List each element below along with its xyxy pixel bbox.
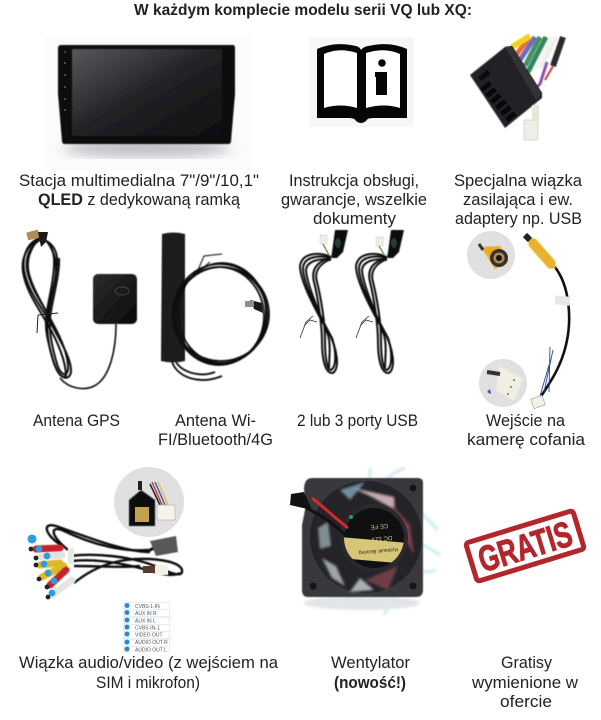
photo: cooling fan xyxy=(290,468,440,615)
caption: freebies xyxy=(471,654,578,711)
caption: fan: (nowość!) xyxy=(334,674,406,692)
photo: USB cable 2 xyxy=(356,230,404,373)
legend: connector table: AUX IN L xyxy=(135,618,156,624)
legend: connector table: CVBS-1-IN xyxy=(135,604,160,610)
caption: power harness: adaptery np. USB xyxy=(455,210,582,228)
panel: rear camera input xyxy=(467,231,586,449)
caption: WiFi antenna xyxy=(158,412,273,449)
panel: GPS antenna xyxy=(23,230,137,430)
caption: rear camera input: Wejście na xyxy=(486,412,566,430)
photo: GPS antenna xyxy=(23,230,137,389)
panel: manual xyxy=(281,37,427,228)
caption: power harness: Specjalna wiązka xyxy=(454,172,583,190)
photo: cooling fan: DC 12V xyxy=(371,534,392,542)
caption: WiFi antenna: Antena Wi- xyxy=(175,412,256,430)
panel: WiFi antenna xyxy=(158,232,273,449)
caption: audio video harness xyxy=(19,654,279,692)
title: W każdym komplecie modelu serii VQ lub XQ: xyxy=(134,2,472,19)
caption: manual: Instrukcja obsługi, xyxy=(289,172,419,190)
panel: head unit xyxy=(19,37,259,209)
photo: cooling fan: CE FE xyxy=(370,522,388,530)
caption: power harness: zasilająca i ew. xyxy=(463,191,573,209)
photo: USB cable 1 xyxy=(300,230,348,373)
caption: station xyxy=(19,172,259,209)
photo: ISO connector with wires xyxy=(470,36,563,140)
photo: cooling fan: Hydraulic Bearing xyxy=(358,546,398,555)
legend: connector table: CVBS-IN-1 xyxy=(135,626,160,632)
photo: RCA harness xyxy=(28,525,182,599)
panel: fan xyxy=(290,468,440,692)
legend: connector table: AUX IN R xyxy=(135,611,157,617)
panel: power harness xyxy=(454,36,583,228)
caption: audio video harness: SIM i mikrofon) xyxy=(96,674,200,692)
caption: WiFi antenna: FI/Bluetooth/4G xyxy=(158,431,273,449)
caption: fan: Wentylator xyxy=(331,654,411,672)
legend: connector table: AUDIO OUT R xyxy=(135,640,168,646)
caption: freebies: wymienione w xyxy=(471,674,578,692)
caption: station: QLED z dedykowaną ramką xyxy=(38,191,241,209)
caption: power harness xyxy=(454,172,583,228)
caption: manual xyxy=(281,172,427,228)
icon: book with info sign xyxy=(310,37,414,127)
caption: rear camera input xyxy=(467,412,586,449)
inset: RCA plug xyxy=(467,231,515,279)
panel: audio video harness xyxy=(19,467,279,692)
caption: fan xyxy=(331,654,411,692)
caption: USB ports: 2 lub 3 porty USB xyxy=(297,412,418,430)
caption: manual: dokumenty xyxy=(313,210,397,228)
photo: multimedia station xyxy=(45,37,252,170)
caption: freebies: Gratisy xyxy=(501,654,553,672)
photo: camera cable xyxy=(525,235,570,409)
caption: station: Stacja multimedialna 7"/9"/10,1" xyxy=(19,172,259,190)
legend: connector table: VIDEO OUT xyxy=(135,632,163,638)
caption: manual: gwarancje, wszelkie xyxy=(281,191,427,209)
legend: connector table: AUDIO OUT L xyxy=(135,648,167,654)
inset: SIM connector xyxy=(114,467,184,537)
caption: freebies: ofercie xyxy=(500,693,552,711)
photo: WiFi/Bluetooth/4G antenna xyxy=(161,232,269,380)
caption: rear camera input: kamerę cofania xyxy=(467,431,586,449)
panel: USB ports xyxy=(297,230,418,430)
caption: GPS antenna: Antena GPS xyxy=(33,412,120,430)
inset: white plug xyxy=(479,359,527,407)
panel: freebies xyxy=(466,511,585,711)
legend: connector table xyxy=(123,602,170,654)
caption: audio video harness: Wiązka audio/video (z wejściem na xyxy=(19,654,279,672)
